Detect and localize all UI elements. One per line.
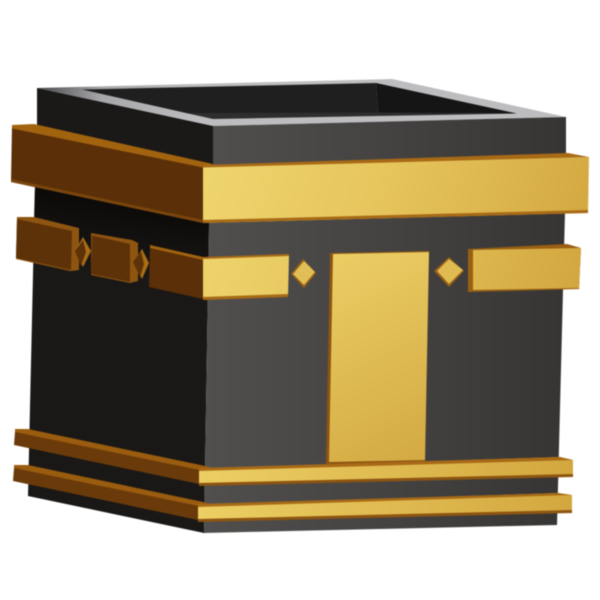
- icon: right wall diamond right: [434, 257, 464, 287]
- icon: left wall diamond 2: [133, 249, 149, 279]
- icon: door: [326, 251, 429, 464]
- icon: right wall gold block: [468, 244, 581, 292]
- rim right face: [213, 117, 566, 170]
- panel: top parapet: [37, 79, 566, 170]
- icon: left wall gold block 1: [16, 217, 79, 271]
- panel: lower gold stripe 2: [13, 465, 572, 522]
- icon: right wall diamond left: [291, 259, 316, 288]
- panel: upper gold band: [11, 124, 589, 223]
- inner well right wall: [376, 83, 517, 114]
- rim left face: [37, 88, 213, 170]
- panel: lower gold stripe 1: [14, 429, 573, 486]
- inner well back wall: [82, 83, 378, 113]
- icon: left wall gold block 2: [91, 233, 138, 283]
- inner well floor: [186, 112, 517, 119]
- panel: body right wall: [204, 212, 565, 533]
- rim top surface: [37, 79, 566, 126]
- panel: body left wall: [28, 186, 209, 533]
- icon: corner gold block: [149, 245, 289, 300]
- icon: left wall diamond 1: [75, 237, 91, 267]
